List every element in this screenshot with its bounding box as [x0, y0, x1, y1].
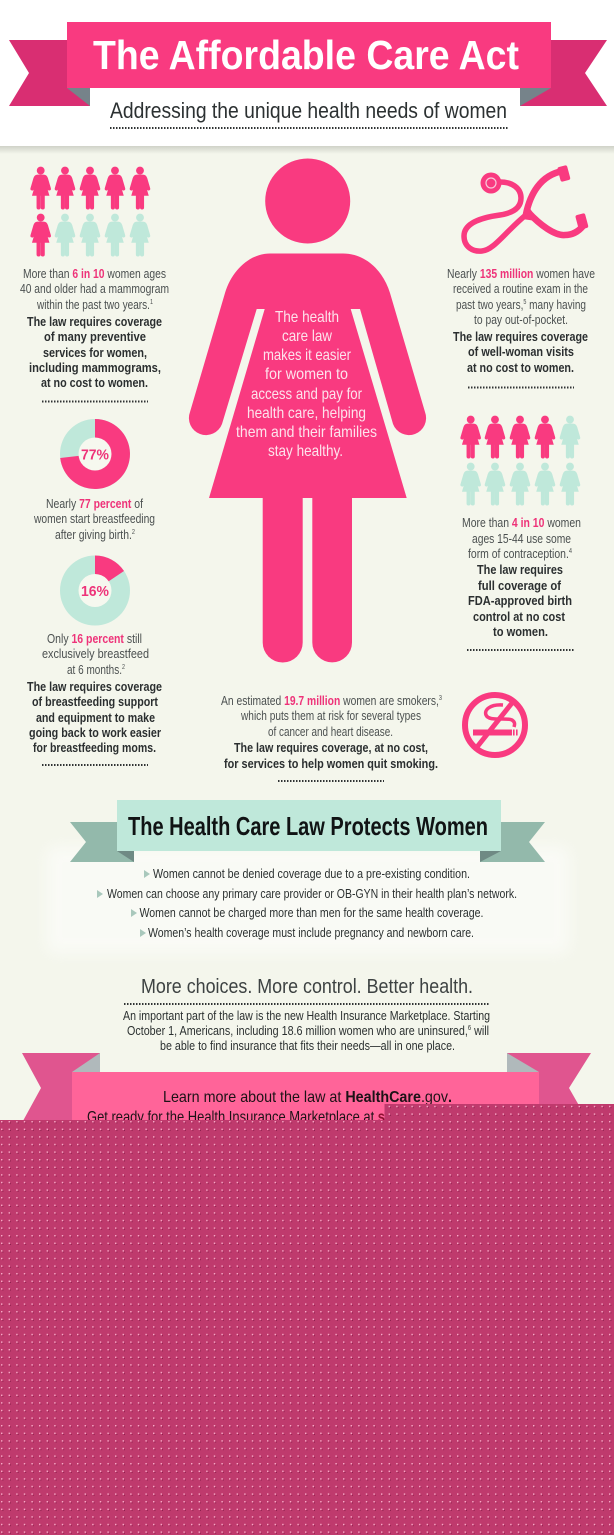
mammogram law text: of many preventive [44, 329, 146, 344]
breastfeeding six months text: 2 [122, 664, 125, 671]
woman figure text: stay healthy. [268, 443, 343, 460]
breastfeeding law text: for breastfeeding moms. [33, 740, 156, 755]
mammogram law text: at no cost to women. [41, 375, 148, 390]
panel: contraception [461, 416, 581, 650]
contraception text: form of contraception. [468, 546, 594, 561]
smoking text: which puts them at risk for several types [240, 708, 421, 723]
panel: smoking [221, 693, 525, 781]
woman figure text: for women to [265, 366, 348, 383]
title: The Affordable Care Act [93, 32, 519, 78]
woman figure text: them and their families [236, 424, 377, 441]
breastfeeding start text: women start breastfeeding [33, 511, 155, 526]
marketplace paragraph: 6 [468, 1025, 471, 1032]
section ribbon [70, 800, 545, 862]
contraception text: More than 4 in 10 women [462, 515, 581, 530]
contraception law text: full coverage of [478, 578, 562, 593]
panel: breastfeeding statistics [27, 419, 162, 765]
breastfeeding law text [27, 679, 162, 755]
smoking text: 3 [439, 695, 442, 702]
footer ribbon [18, 1053, 593, 1142]
breastfeeding law text: and equipment to make [36, 710, 155, 725]
mammogram text: 1 [150, 299, 153, 306]
mammogram text: within the past two years. [37, 297, 183, 312]
protections list: Women’s health coverage must include pregnancy and newborn care. [148, 925, 474, 940]
icon: ten women pictogram [31, 167, 150, 256]
chart: 16 percent donut [60, 556, 130, 626]
marketplace paragraph: will [471, 1023, 489, 1038]
well-woman law text: The law requires coverage [453, 329, 588, 344]
well-woman text: 5 [523, 299, 526, 306]
well-woman law text: at no cost to women. [467, 360, 574, 375]
panel: more choices [123, 976, 490, 1053]
woman figure text: The health [275, 309, 339, 326]
subtitle: Addressing the unique health needs of women [110, 98, 507, 123]
well-woman text: past two years, [456, 297, 543, 312]
woman figure text: care law [282, 328, 332, 345]
mammogram law text: services for women, [43, 345, 147, 360]
marketplace paragraph: An important part of the law is the new Health Insurance Marketplace. Starting [123, 1008, 490, 1023]
smoking text [221, 693, 442, 739]
tagline: More choices. More control. Better health. [141, 976, 473, 998]
smoking text: of cancer and heart disease. [268, 724, 393, 739]
contraception law text [468, 562, 572, 639]
contraception text [462, 515, 581, 561]
marketplace paragraph [123, 1008, 490, 1053]
mammogram law text: including mammograms, [29, 360, 161, 375]
smoking text: An estimated 19.7 million women are smokers, [221, 693, 465, 708]
contraception law text: control at no cost [473, 609, 566, 624]
contraception law text: to women. [493, 624, 548, 639]
mammogram text: More than 6 in 10 women ages [23, 266, 166, 281]
well-woman law text [453, 329, 588, 375]
breastfeeding law text: of breastfeeding support [32, 694, 159, 709]
protections list: Women cannot be charged more than men for the same health coverage. [140, 905, 484, 920]
woman figure text: makes it easier [263, 347, 352, 364]
mammogram law text: The law requires coverage [27, 314, 162, 329]
well-woman text: Nearly 135 million women have [447, 266, 595, 281]
mammogram text [20, 266, 169, 312]
breastfeeding six months text: Only 16 percent still [47, 631, 142, 646]
breastfeeding six months text: exclusively breastfeed [42, 646, 149, 661]
well-woman text [447, 266, 595, 327]
smoking law text: for services to help women quit smoking. [224, 756, 438, 771]
protections list: Women can choose any primary care provider or OB-GYN in their health plan’s network. [107, 886, 517, 901]
mammogram law text [27, 314, 162, 390]
woman figure text: health care, helping [247, 405, 366, 422]
breastfeeding six months text: at 6 months. [67, 662, 139, 677]
icon: stethoscope [464, 165, 589, 251]
contraception law text: FDA-approved birth [468, 593, 572, 608]
marketplace link line: Get ready for the Health Insurance Marketplace at s [87, 1109, 385, 1126]
marketplace paragraph: October 1, Americans, including 18.6 million women who are uninsured, [127, 1023, 540, 1038]
breastfeeding six months text [42, 631, 149, 677]
icon: no smoking [465, 695, 525, 755]
smoking law text: The law requires coverage, at no cost, [234, 740, 428, 755]
smoking law text [224, 740, 438, 771]
icon: ten women pictogram [461, 416, 580, 505]
section heading: The Health Care Law Protects Women [128, 811, 488, 841]
panel: well-woman visits [447, 165, 595, 388]
panel: mammogram statistic [20, 167, 169, 402]
chart: 77 percent donut [60, 419, 130, 489]
woman figure text [236, 309, 377, 460]
breastfeeding start text: after giving birth. [55, 527, 151, 542]
breastfeeding law text: The law requires coverage [27, 679, 162, 694]
dotted overlay block [0, 1104, 614, 1535]
header panel [0, 0, 614, 154]
chart: 77 percent donut: 77% [81, 446, 109, 464]
breastfeeding start text: Nearly 77 percent of [46, 496, 143, 511]
marketplace paragraph: be able to find insurance that fits their needs—all in one place. [160, 1038, 455, 1053]
contraception text: ages 15-44 use some [472, 531, 571, 546]
well-woman text: many having [526, 297, 586, 312]
breastfeeding law text: going back to work easier [29, 725, 161, 740]
well-woman law text: of well-woman visits [468, 344, 574, 359]
contraception law text: The law requires [477, 562, 563, 577]
protections list [97, 866, 517, 940]
title ribbon [9, 22, 607, 106]
contraception text: 4 [569, 548, 572, 555]
well-woman text: to pay out-of-pocket. [474, 312, 568, 327]
central woman figure [189, 158, 426, 662]
mammogram text: 40 and older had a mammogram [20, 281, 169, 296]
footer link line: Learn more about the law at HealthCare.gov. [163, 1089, 452, 1106]
breastfeeding start text [33, 496, 155, 542]
protections list: Women cannot be denied coverage due to a pre-existing condition. [153, 866, 470, 881]
woman figure text: access and pay for [251, 386, 363, 403]
chart: 16 percent donut: 16% [81, 583, 109, 600]
breastfeeding start text: 2 [132, 529, 135, 536]
panel: the health care law protects women [46, 800, 570, 954]
